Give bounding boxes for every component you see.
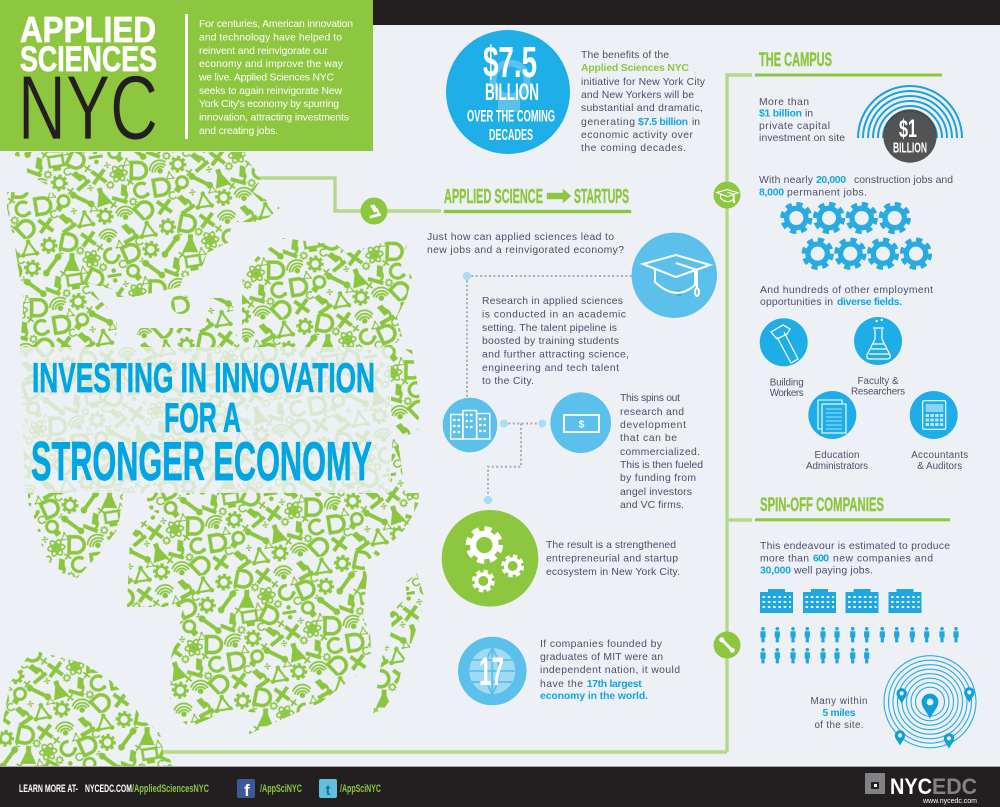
text: spin out: development — [620, 420, 686, 431]
text: research: and further attracting science, — [482, 350, 629, 360]
intro text: York City's economy by spurring — [199, 99, 339, 110]
icon: twitter — [319, 779, 337, 799]
text: MIT: economy in the world. — [540, 691, 648, 702]
icon: hammer — [760, 318, 808, 366]
text: diverse fields: opportunities in — [760, 297, 833, 308]
icons: gears row — [782, 204, 930, 268]
heading: applied science to startups: APPLIED SCIENCE — [444, 186, 543, 208]
labels: job types: Administrators — [806, 461, 868, 472]
text: research: boosted by training students — [482, 336, 619, 347]
text: five miles: Many within — [810, 696, 868, 707]
heading: applied science to startups: STARTUPS — [574, 186, 629, 208]
text: benefits: $7.5 billion — [638, 117, 688, 128]
icon: globe 17: 17 — [479, 650, 504, 694]
text: jobs: 20,000 — [816, 175, 846, 186]
text: spin out: research and — [620, 407, 684, 418]
text: research: setting. The talent pipeline is — [482, 323, 617, 334]
text: MIT — [540, 639, 680, 702]
labels: job types: Researchers — [851, 386, 905, 398]
panel: the campus — [755, 50, 968, 472]
icons: buildings — [760, 589, 922, 613]
$7.5 billion circle: BILLION — [485, 79, 539, 106]
icon: dollar bill — [550, 392, 611, 453]
$7.5 billion circle: OVER THE COMING — [467, 106, 555, 126]
text: question: Just how can applied sciences lead to — [427, 232, 614, 243]
connector lines — [163, 75, 752, 752]
text: question — [427, 232, 624, 256]
text: spin out: commercialized. — [620, 447, 700, 458]
icon: globe 17 — [458, 637, 527, 705]
text: diverse fields: diverse fields. — [837, 297, 902, 308]
icon: wrench on timeline — [714, 632, 740, 658]
text: one billion: More than — [759, 97, 809, 108]
main headline: FOR A — [164, 394, 241, 441]
labels: job types: Education — [814, 450, 860, 461]
text: benefits: Applied Sciences NYC — [581, 63, 689, 74]
text: research: Research in applied sciences — [482, 296, 623, 307]
labels: job types: Workers — [770, 388, 804, 399]
top bar — [373, 0, 1000, 25]
text: one billion: $1 billion — [759, 108, 802, 120]
title: Applied Sciences NYC — [18, 9, 158, 159]
footer: NYCEDC.COM — [85, 783, 132, 795]
icon: cap on timeline — [714, 182, 740, 208]
text: result: ecosystem in New York City. — [546, 567, 680, 578]
main headline — [31, 354, 375, 492]
labels: job types: Accountants — [911, 450, 968, 461]
icon: facebook: f — [244, 781, 250, 800]
intro text: and technology have helped to — [199, 32, 342, 44]
labels: job types: Building — [770, 378, 804, 388]
text: MIT: If companies founded by — [540, 639, 663, 650]
panel: header — [0, 0, 373, 159]
connector dots — [463, 272, 546, 504]
text: benefits: substantial and dramatic, — [581, 103, 703, 114]
logo: NYCEDC: www.nycedc.com — [922, 798, 977, 805]
text: research: is conducted in an academic — [482, 310, 626, 320]
text: one billion: in — [805, 108, 813, 120]
text: result: entrepreneurial and startup — [546, 554, 678, 564]
labels: job types: Faculty & — [858, 376, 899, 387]
text: MIT: independent nation, it would — [540, 665, 680, 676]
chart: arcs with one billion: BILLION — [893, 140, 927, 156]
map rings with pins — [884, 656, 976, 749]
footer: LEARN MORE AT- — [19, 783, 78, 795]
icon: calculator — [910, 391, 958, 439]
text: research — [482, 296, 629, 387]
text: jobs: construction jobs and — [854, 175, 953, 186]
labels: job types — [770, 376, 968, 472]
text: benefits: The benefits of the — [581, 50, 669, 61]
arrow — [547, 189, 571, 203]
footer: /AppliedSciencesNYC — [132, 783, 209, 795]
text: spin out: angel investors — [620, 487, 692, 498]
logo: NYCEDC — [865, 773, 977, 805]
icon: gears — [442, 510, 538, 607]
intro text: and creating jobs. — [199, 126, 278, 137]
text: one billion — [759, 97, 845, 144]
text: benefits: in — [692, 117, 700, 128]
text: MIT: graduates of MIT were an — [540, 652, 663, 663]
text: five miles: of the site. — [814, 720, 864, 731]
heading: SPIN-OFF COMPANIES — [760, 495, 884, 516]
intro text: innovation, attracting investments — [199, 112, 349, 124]
text: research: to the City. — [482, 376, 534, 387]
text: companies: 600 — [813, 554, 829, 564]
text: diverse fields — [760, 285, 933, 308]
text: companies: well paying jobs. — [793, 566, 873, 576]
footer: /AppSciNYC — [340, 783, 381, 795]
text: benefits: and New Yorkers will be — [581, 90, 694, 101]
text: spin out — [620, 393, 703, 511]
text: spin out: This spins out — [620, 393, 680, 404]
text: result: The result is a strengthened — [546, 540, 676, 551]
text: spin out: and VC firms. — [620, 500, 684, 511]
text: research: engineering and tech talent — [482, 363, 619, 374]
chart: arcs with one billion: $1 — [899, 115, 917, 143]
icon: flask — [854, 317, 902, 365]
intro text — [198, 19, 353, 137]
icon: city buildings — [443, 398, 497, 452]
$7.5 billion circle: $7.5 — [483, 38, 537, 87]
text: jobs — [759, 175, 953, 198]
main headline: INVESTING IN INNOVATION — [32, 354, 375, 401]
text: jobs: 8,000 — [759, 188, 784, 198]
chart: arcs with one billion — [858, 86, 962, 163]
text: benefits: initiative for New York City — [581, 77, 706, 88]
text: MIT: have the — [540, 679, 583, 690]
dotted connectors — [467, 276, 632, 500]
map of New York City made of science icons — [0, 152, 425, 767]
text: spin out: This is then fueled — [620, 460, 703, 471]
intro text: reinvent and reinvigorate our — [199, 46, 329, 57]
text: companies — [760, 541, 950, 576]
text: one billion: private capital — [759, 121, 830, 132]
intro text: economy and improve the way — [199, 59, 344, 70]
icons: people — [760, 627, 959, 663]
text: spin out: that can be — [620, 433, 677, 444]
footer — [0, 766, 1000, 807]
intro text: we live. Applied Sciences NYC — [198, 72, 334, 84]
text: result — [546, 540, 680, 578]
text: benefits: the coming decades. — [581, 143, 686, 154]
title: Applied Sciences NYC: NYC — [18, 58, 158, 159]
main headline: STRONGER ECONOMY — [31, 430, 372, 492]
$7.5 billion circle — [446, 30, 570, 154]
icon: graduation cap — [632, 233, 717, 318]
icon: documents — [808, 391, 856, 439]
$7.5 billion circle: DECADES — [489, 127, 533, 144]
text: companies: new companies and — [833, 554, 933, 564]
footer: /AppSciNYC — [260, 783, 302, 795]
text: five miles: 5 miles — [822, 708, 856, 719]
text: MIT: 17th largest — [587, 679, 642, 690]
heading: THE CAMPUS — [759, 50, 832, 71]
text: spin out: by funding from — [620, 473, 696, 484]
text: companies: more than — [760, 554, 809, 564]
title: Applied Sciences NYC: APPLIED — [20, 9, 156, 50]
text: diverse fields: And hundreds of other employment — [760, 285, 933, 296]
title: Applied Sciences NYC: SCIENCES — [20, 40, 157, 79]
text: companies: 30,000 — [760, 566, 791, 576]
text: five miles — [810, 696, 868, 731]
text: one billion: investment on site — [759, 133, 845, 144]
icon: facebook — [237, 779, 255, 800]
logo: NYCEDC: EDC — [932, 774, 977, 799]
text: jobs: permanent jobs. — [787, 188, 867, 198]
text: benefits: economic activity over — [581, 130, 694, 141]
panel: spin-off companies — [755, 495, 976, 749]
text: question: new jobs and a reinvigorated economy? — [427, 245, 624, 256]
intro text: seeks to again reinvigorate New — [199, 86, 342, 97]
intro text: For centuries, American innovation — [199, 19, 353, 30]
text: benefits — [581, 50, 706, 154]
logo: NYCEDC: NYC — [890, 774, 932, 799]
icon: microscope — [360, 198, 388, 224]
icon: dollar bill: $ — [579, 418, 585, 430]
text: companies: This endeavour is estimated to produce — [760, 541, 950, 552]
icon: twitter: t — [326, 782, 330, 799]
labels: job types: & Auditors — [917, 461, 962, 472]
text: jobs: With nearly — [759, 175, 814, 186]
text: benefits: generating — [581, 117, 635, 128]
